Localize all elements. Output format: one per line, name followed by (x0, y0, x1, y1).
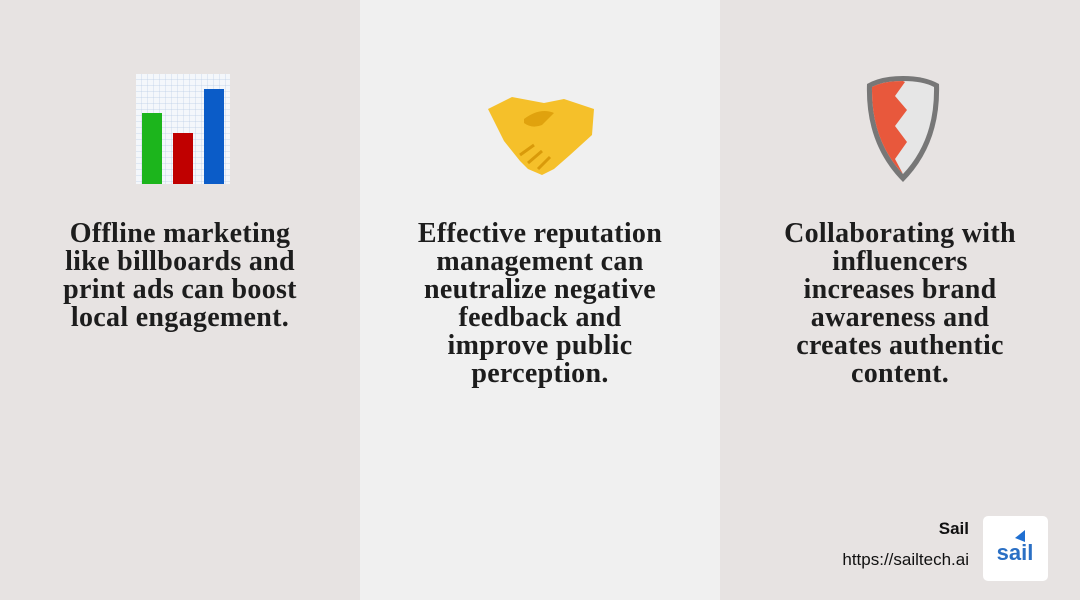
footer: url: https://sailtech.ai (842, 550, 969, 569)
icon: shield (866, 76, 940, 182)
text: influencers: creates authentic (796, 330, 1004, 361)
text: reputation management: improve public (448, 330, 632, 361)
text: reputation management: neutralize negative (424, 274, 656, 305)
text: influencers: influencers (832, 246, 968, 277)
text: influencers: increases brand (804, 274, 996, 305)
text: offline marketing: local engagement. (71, 302, 289, 333)
text: reputation management: management can (436, 246, 644, 277)
footer: brand name: Sail (939, 519, 969, 538)
panel: reputation management (360, 0, 720, 600)
text: offline marketing: print ads can boost (63, 274, 297, 305)
text: reputation management (418, 218, 662, 389)
icon: handshake (488, 97, 594, 175)
text: reputation management: perception. (471, 358, 609, 389)
text: influencers (784, 218, 1016, 389)
text: reputation management: Effective reputation (418, 218, 662, 249)
text: offline marketing (63, 218, 297, 333)
logo (983, 516, 1048, 581)
icon: bar chart (136, 74, 230, 184)
text: influencers: content. (851, 358, 949, 389)
text: influencers: awareness and (811, 302, 989, 333)
panel: influencers (720, 0, 1080, 600)
text: reputation management: feedback and (458, 302, 622, 333)
text: offline marketing: Offline marketing (70, 218, 290, 249)
logo: sail (997, 540, 1033, 565)
text: influencers: Collaborating with (784, 218, 1016, 249)
text: offline marketing: like billboards and (65, 246, 295, 277)
panel: offline marketing (0, 0, 360, 600)
